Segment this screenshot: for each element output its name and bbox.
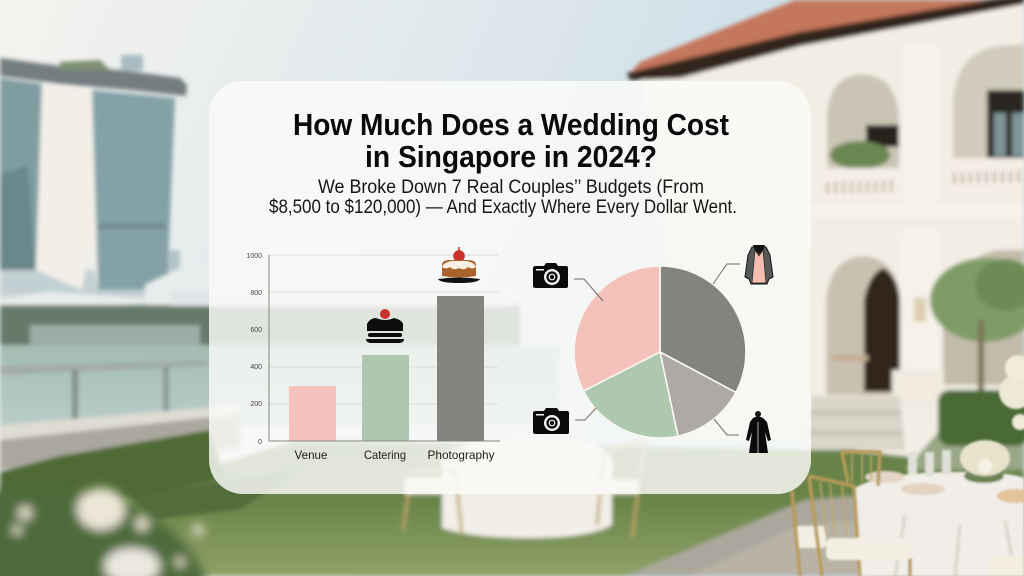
hotel building [640,0,1024,470]
trees and hedges [930,258,1024,342]
y-axis labels: 600 [250,327,262,334]
x-axis labels: Photography [428,448,494,462]
arches upper [827,74,899,170]
y-axis labels [246,253,262,446]
slice: taupe [660,352,736,436]
pie chart [574,266,746,438]
bar: photography [437,296,484,441]
title: How Much Does a Wedding Cost [293,107,729,142]
Marina Bay Sands towers [0,55,187,290]
lawn [0,440,1024,576]
icon: black coat [746,411,771,453]
bar: venue [289,386,336,441]
icon: brown cake [438,247,480,283]
chairs [796,526,826,548]
plates and glasses [865,471,905,483]
path [625,495,870,576]
slice: pink [574,266,660,391]
subtitle [269,177,737,218]
icon: pink dress with jacket [745,245,773,284]
icon: black cake [366,309,404,343]
x-axis labels: Venue [294,448,328,462]
bar chart [246,253,500,462]
y-axis labels: 800 [250,290,262,297]
icon: camera top [533,263,568,288]
foreground flowers [0,490,210,576]
slice: green [583,352,678,438]
x-axis labels [294,448,494,462]
railing [0,360,208,375]
x-axis labels: Catering [364,448,406,462]
y-axis labels: 400 [250,364,262,371]
bar: catering [362,355,409,441]
y-axis labels: 200 [250,401,262,408]
slice: gray [660,266,746,392]
table flowers [964,469,1004,483]
balusters [826,176,1024,188]
panel: frosted card [209,81,811,494]
leader lines [574,264,740,435]
title [293,107,729,174]
y-axis labels: 1000 [246,253,262,260]
subtitle: $8,500 to $120,000) — And Exactly Where Every Dollar Went. [269,197,737,218]
background table [442,438,612,538]
arches lower [826,256,900,395]
subtitle: We Broke Down 7 Real Couples’’ Budgets (From [318,177,704,198]
title: in Singapore in 2024? [365,139,657,174]
y-axis labels: 0 [258,439,262,446]
foreground table [855,472,1024,576]
icon: camera bottom [533,408,569,434]
